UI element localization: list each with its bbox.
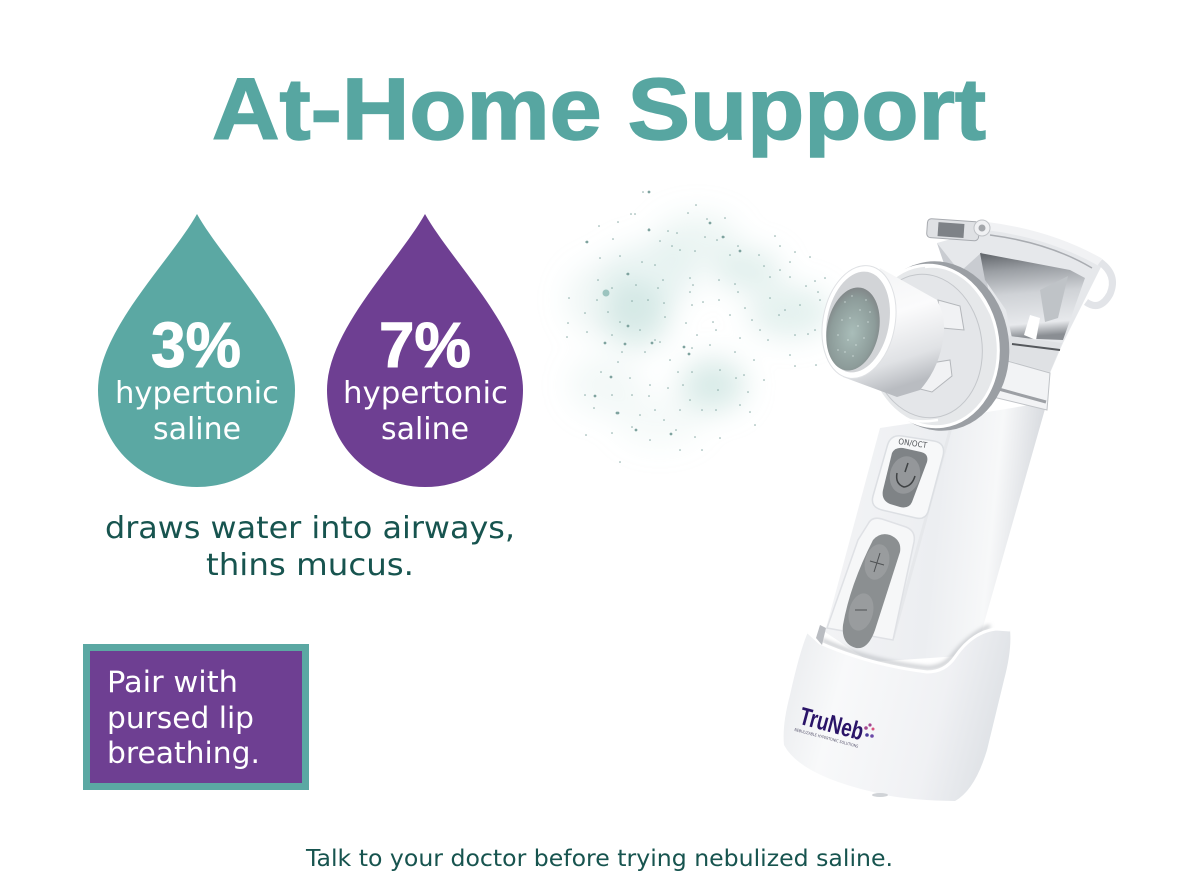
mouthpiece tabs <box>916 300 964 392</box>
cradle base <box>784 625 1010 801</box>
explanation text: draws water into airways, <box>105 511 515 546</box>
TruNeb logo: NEBULIZABLE HYPERTONIC SOLUTIONS <box>794 727 859 749</box>
footer note: Talk to your doctor before trying nebulized saline. <box>305 846 893 872</box>
collar highlight arc <box>866 267 990 421</box>
hinge <box>926 218 990 241</box>
purple drop: 7% hypertonic saline: hypertonic <box>343 376 508 411</box>
upper button panel: ON/OCT <box>898 437 928 450</box>
mist spray <box>566 192 832 462</box>
purple drop: 7% hypertonic saline: 7% <box>379 309 471 381</box>
callout: pursed lip breathing: Pair with <box>107 665 238 699</box>
callout: pursed lip breathing <box>86 648 306 786</box>
explanation text: thins mucus. <box>206 548 414 583</box>
teal drop: 3% hypertonic saline: 3% <box>151 309 241 381</box>
explanation text <box>105 511 515 583</box>
callout: pursed lip breathing: pursed lip <box>107 701 254 735</box>
device body <box>825 402 1047 662</box>
mouthpiece opening <box>813 259 905 385</box>
callout: pursed lip breathing: breathing. <box>107 736 260 770</box>
lower button panel <box>827 518 914 648</box>
nebulizer device <box>784 218 1112 801</box>
TruNeb logo: TruNeb <box>797 702 867 746</box>
teal drop: 3% hypertonic saline: saline <box>153 412 241 447</box>
purple drop: 7% hypertonic saline: saline <box>381 412 469 447</box>
logo sparkle <box>864 723 874 738</box>
collar ring <box>855 252 1020 440</box>
teal drop: 3% hypertonic saline <box>98 214 295 487</box>
upper button panel <box>872 436 944 518</box>
teal drop: 3% hypertonic saline: hypertonic <box>115 376 279 411</box>
title: At-Home Support <box>212 61 986 158</box>
purple drop: 7% hypertonic saline <box>327 214 523 487</box>
medication chamber <box>937 226 1112 410</box>
mouthpiece cylinder <box>843 268 944 397</box>
